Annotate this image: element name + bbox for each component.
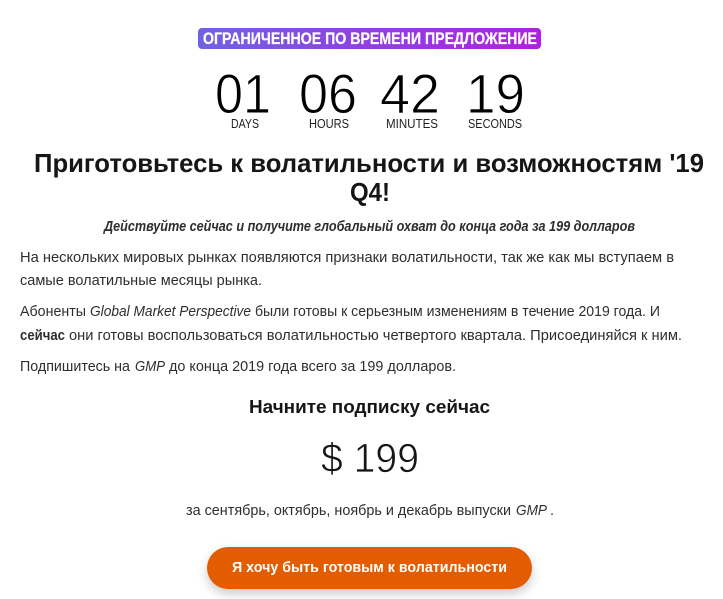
call to action button <box>207 547 532 589</box>
paragraph: volatility signs <box>20 250 674 289</box>
paragraph: subscribers: были готовы к серьезным изменениям в течение 2019 года. И <box>255 304 660 320</box>
price: $ 199 <box>321 435 419 481</box>
days: 01 <box>215 62 271 125</box>
hours: HOURS <box>309 117 349 131</box>
seconds: SECONDS <box>468 117 522 131</box>
minutes: 42 <box>380 62 440 125</box>
paragraph: subscribers: сейчас <box>20 328 65 344</box>
call to action button: Я хочу быть готовым к волатильности <box>232 560 507 576</box>
issues note: . <box>550 503 554 519</box>
paragraph: subscribe offer <box>20 359 456 375</box>
main heading: Приготовьтесь к волатильности и возможностям '19 <box>34 148 704 178</box>
paragraph: subscribe offer: до конца 2019 года всего за 199 долларов. <box>169 359 456 375</box>
main heading: Q4! <box>350 177 390 207</box>
paragraph: subscribers <box>20 304 682 344</box>
paragraph: subscribers: Global Market Perspective <box>90 304 251 320</box>
main heading <box>34 148 704 207</box>
issues note: за сентябрь, октябрь, ноябрь и декабрь выпуски <box>186 503 511 519</box>
subscription heading: Начните подписку сейчас <box>249 397 490 417</box>
minutes: MINUTES <box>386 117 438 131</box>
hours: 06 <box>299 62 357 125</box>
days: DAYS <box>231 117 259 131</box>
paragraph: subscribers: Абоненты <box>20 304 86 320</box>
subheading: Действуйте сейчас и получите глобальный охват до конца года за 199 долларов <box>102 219 635 235</box>
seconds: 19 <box>466 62 525 125</box>
paragraph: subscribe offer: GMP <box>135 359 165 375</box>
issues note: GMP <box>516 503 547 519</box>
paragraph: volatility signs: самые волатильные месяцы рынка. <box>20 273 262 289</box>
paragraph: subscribe offer: Подпишитесь на <box>20 359 131 375</box>
paragraph: volatility signs: На нескольких мировых рынках появляются признаки волатильности, так же как мы вступаем в <box>20 250 674 266</box>
paragraph: subscribers: они готовы воспользоваться волатильностью четвертого квартала. Присоединяйся к ним. <box>69 328 682 344</box>
badge: limited time offer: ОГРАНИЧЕННОЕ ПО ВРЕМЕНИ ПРЕДЛОЖЕНИЕ <box>203 30 537 48</box>
countdown timer <box>215 62 525 131</box>
